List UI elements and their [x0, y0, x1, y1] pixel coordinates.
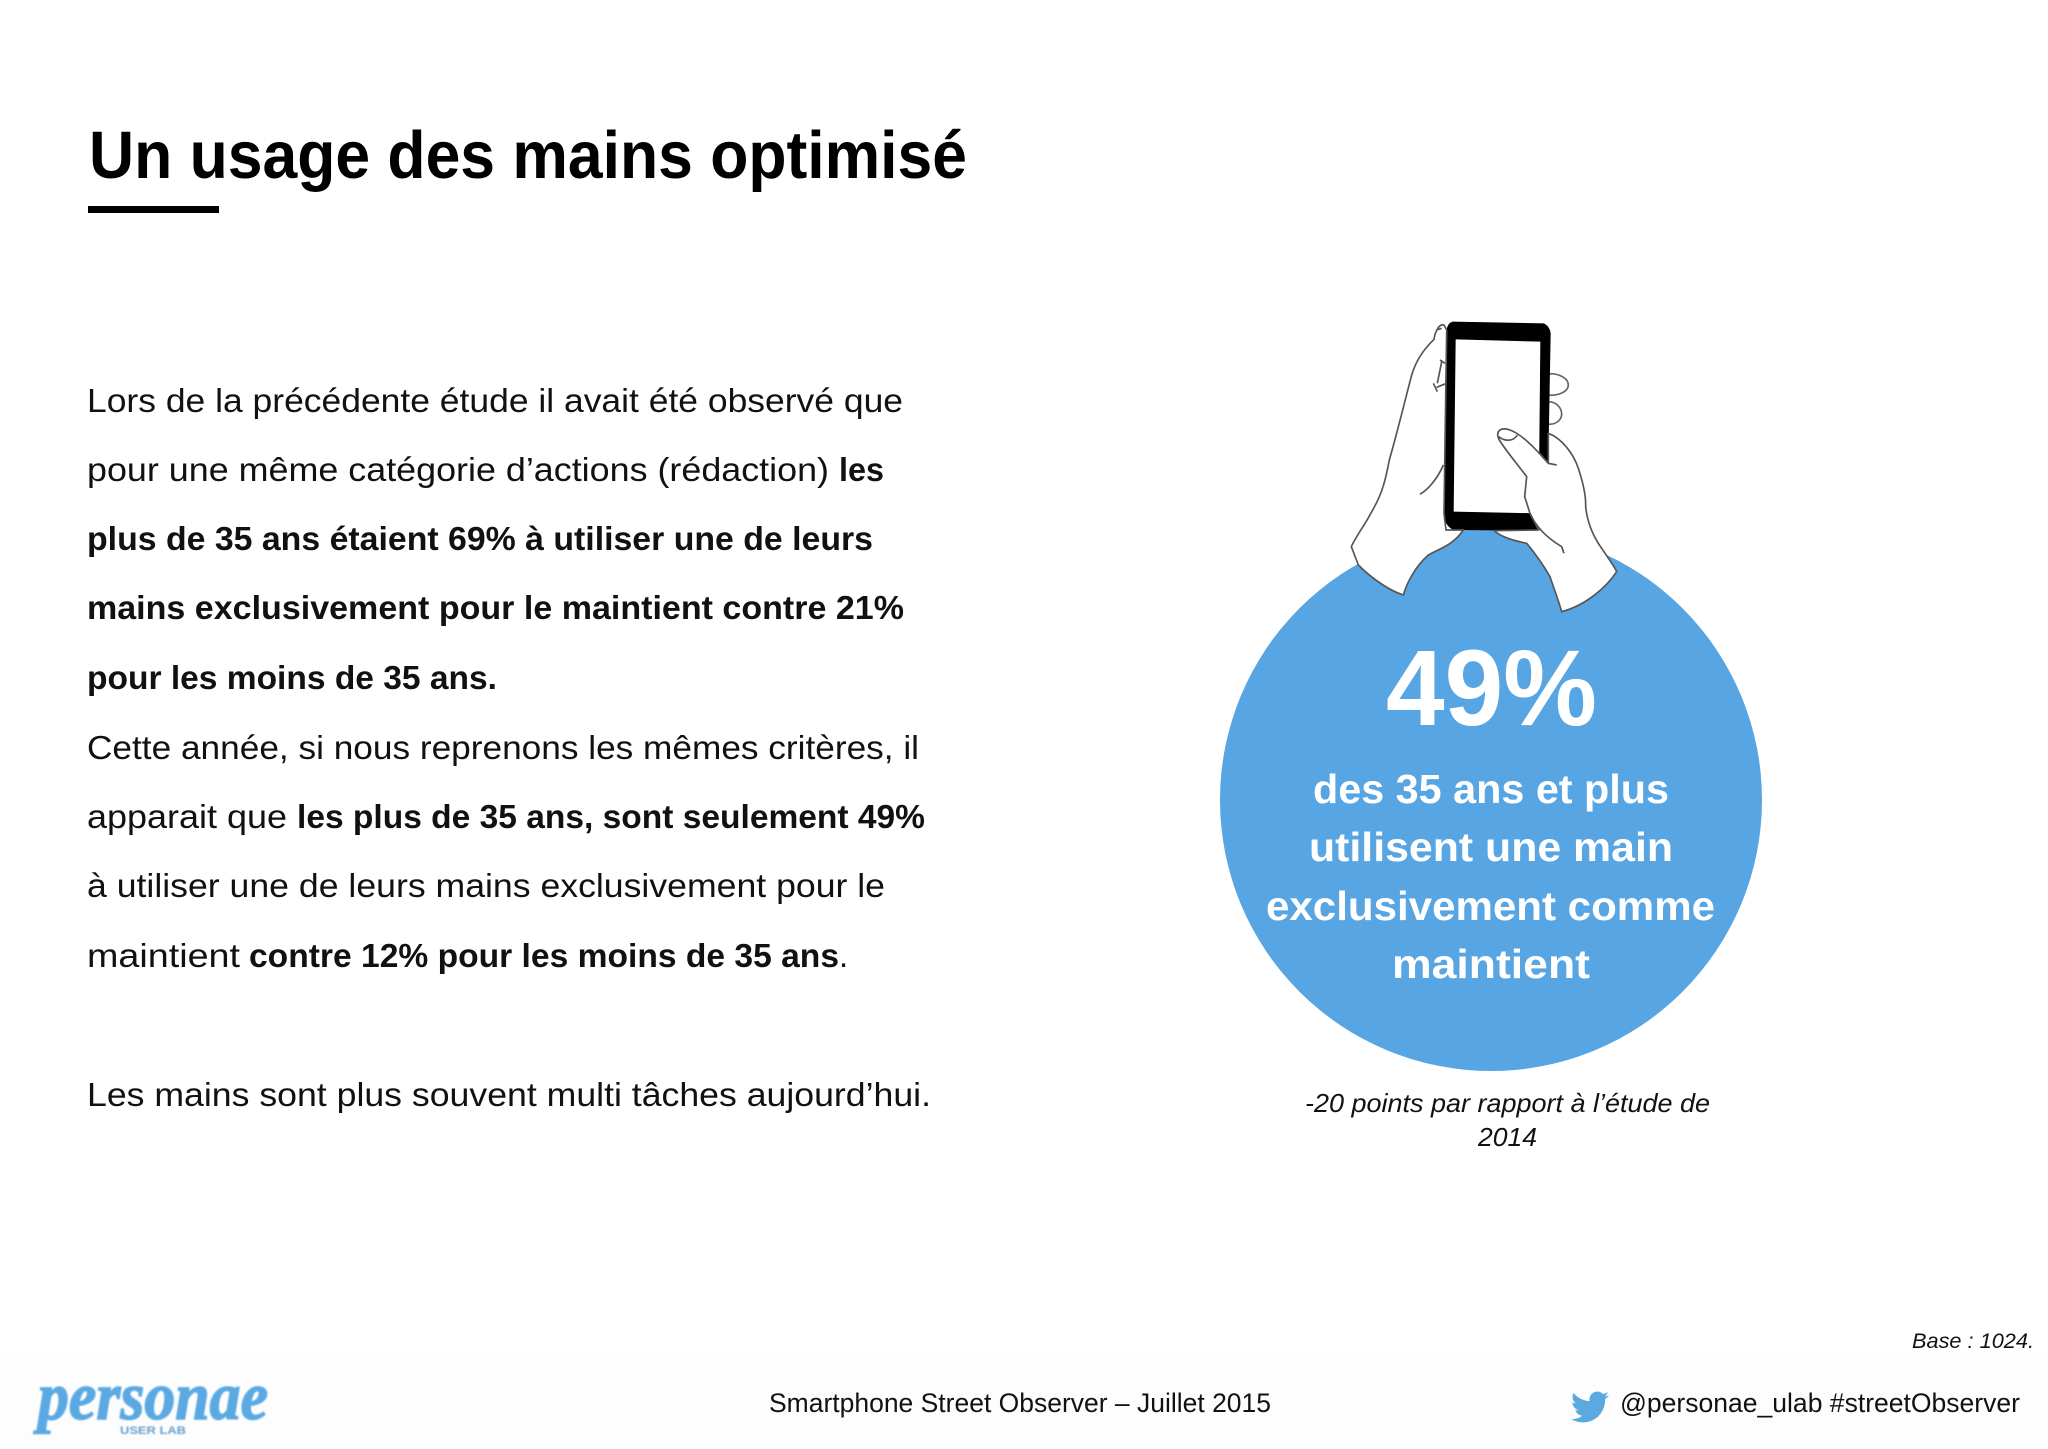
- text block: study findings: les: [839, 451, 884, 488]
- big number: 49%: [1386, 627, 1597, 748]
- icon: hands holding smartphone: [1351, 322, 1617, 612]
- logo: personae: personae: [33, 1358, 268, 1434]
- base note: Base : 1024.: [1912, 1330, 2034, 1353]
- text block: study findings: Cette année, si nous reprenons les mêmes critères, il: [87, 729, 919, 766]
- text block: study findings: les plus de 35 ans, sont seulement 49%: [297, 798, 925, 835]
- note: comparison with 2014: -20 points par rapport à l’étude de: [1305, 1088, 1710, 1118]
- stat circle: 49%: [1220, 529, 1762, 1071]
- text block: study findings: Lors de la précédente étude il avait été observé que: [87, 382, 903, 419]
- left hand: [1351, 325, 1463, 595]
- circle caption: exclusivement comme: [1266, 883, 1715, 929]
- text block: study findings: pour une même catégorie d’actions (rédaction): [87, 451, 829, 488]
- circle caption: [1266, 766, 1715, 987]
- text block: study findings: maintient: [87, 937, 240, 974]
- left hand finger details: [1420, 328, 1447, 494]
- twitter handle: @personae_ulab #streetObserver: [1620, 1388, 2020, 1418]
- title: Un usage des mains optimisé: [89, 118, 967, 193]
- phone: [1444, 322, 1551, 531]
- circle caption: des 35 ans et plus: [1313, 766, 1669, 812]
- text block: study findings: [87, 382, 931, 1113]
- logo: personae: USER LAB: [120, 1425, 186, 1437]
- icon: twitter bird: [1571, 1392, 1609, 1422]
- text block: study findings: plus de 35 ans étaient 69% à utiliser une de leurs: [87, 520, 873, 557]
- text block: study findings: .: [839, 937, 848, 974]
- circle caption: utilisent une main: [1309, 824, 1673, 870]
- right hand fingers behind phone: [1548, 374, 1568, 424]
- text block: study findings: à utiliser une de leurs mains exclusivement pour le: [87, 867, 885, 904]
- footer title: Smartphone Street Observer – Juillet 2015: [769, 1388, 1271, 1418]
- text block: study findings: apparait que: [87, 798, 287, 835]
- thumb nail and hand creases: [1499, 435, 1564, 553]
- note: comparison with 2014: 2014: [1477, 1122, 1537, 1152]
- text block: study findings: pour les moins de 35 ans.: [87, 659, 497, 696]
- text block: study findings: contre 12% pour les moins de 35 ans: [249, 937, 839, 974]
- note: comparison with 2014: [1305, 1088, 1710, 1152]
- text block: study findings: Les mains sont plus souvent multi tâches aujourd’hui.: [87, 1076, 931, 1113]
- circle caption: maintient: [1392, 941, 1590, 987]
- text block: study findings: mains exclusivement pour le maintient contre 21%: [87, 589, 904, 626]
- right hand: [1494, 429, 1617, 612]
